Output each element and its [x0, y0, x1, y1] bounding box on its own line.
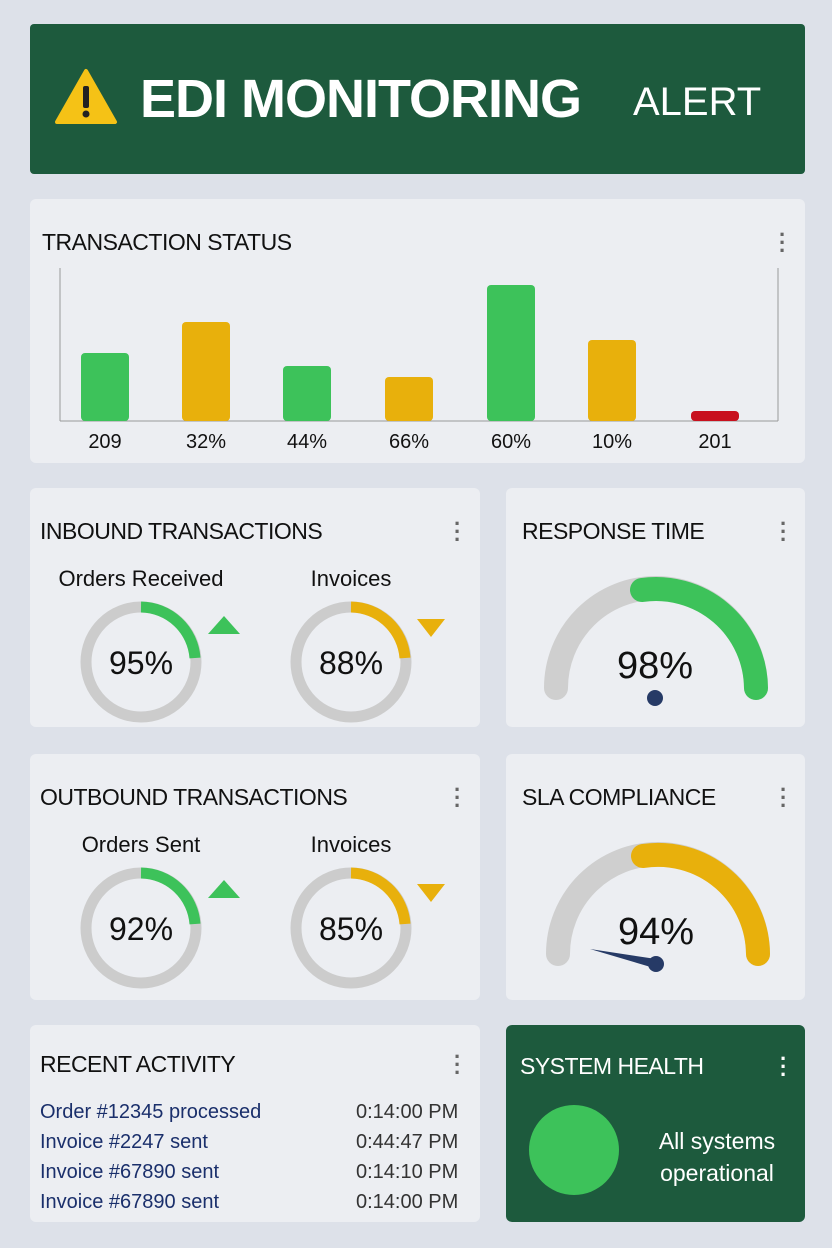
panel: inbound transactions: [30, 488, 480, 727]
bar chart: 66%: [389, 431, 429, 453]
panel: SLA compliance: [506, 754, 805, 1000]
panel: SLA compliance: 94%: [618, 911, 694, 953]
panel: transaction status: TRANSACTION STATUS: [42, 229, 292, 255]
header: [30, 24, 805, 174]
panel: inbound transactions: Invoices: [311, 566, 391, 591]
panel: system health: [506, 1025, 805, 1222]
panel: SLA compliance: SLA COMPLIANCE: [522, 784, 716, 810]
panel: outbound transactions: [30, 754, 480, 1000]
panel: recent activity: ·: [454, 1060, 461, 1085]
panel: response time: 98%: [617, 645, 693, 687]
panel: system health: SYSTEM HEALTH: [520, 1053, 704, 1079]
panel: outbound transactions: ·: [454, 793, 461, 818]
panel: recent activity: 0:14:10 PM: [356, 1161, 458, 1183]
panel: recent activity: Order #12345 processed: [40, 1101, 261, 1123]
panel: outbound transactions: ·: [454, 777, 461, 802]
panel: transaction status: ·: [779, 222, 786, 247]
bar chart: [60, 268, 778, 453]
panel: response time: [506, 488, 805, 727]
panel: inbound transactions: Orders Received: [58, 566, 224, 591]
panel: outbound transactions: Orders Sent: [82, 832, 200, 857]
panel: recent activity: Invoice #67890 sent: [40, 1161, 219, 1183]
panel: transaction status: [30, 199, 805, 463]
bar chart: 209: [88, 431, 122, 453]
bar chart: 201: [698, 431, 732, 453]
panel: recent activity: ·: [454, 1044, 461, 1069]
panel: transaction status: ·: [779, 238, 786, 263]
panel: outbound transactions: Invoices: [311, 832, 391, 857]
panel: outbound transactions: OUTBOUND TRANSACTIONS: [40, 784, 347, 810]
panel: recent activity: RECENT ACTIVITY: [40, 1051, 235, 1077]
panel: SLA compliance: ·: [780, 785, 787, 810]
panel: inbound transactions: INBOUND TRANSACTIONS: [40, 518, 322, 544]
panel: response time: ·: [780, 527, 787, 552]
panel: recent activity: 0:44:47 PM: [356, 1131, 458, 1153]
panel: system health: All systems operational: [659, 1128, 775, 1186]
bar chart: 10%: [592, 431, 632, 453]
panel: response time: ·: [780, 511, 787, 536]
bar chart: 32%: [186, 431, 226, 453]
panel: inbound transactions: 95%: [109, 645, 173, 681]
panel: response time: RESPONSE TIME: [522, 518, 704, 544]
panel: SLA compliance: ·: [780, 777, 787, 802]
panel: outbound transactions: ·: [454, 785, 461, 810]
panel: system health: ·: [780, 1054, 787, 1079]
title: EDI MONITORING: [140, 69, 581, 129]
panel: outbound transactions: 92%: [109, 911, 173, 947]
bar chart: 60%: [491, 431, 531, 453]
panel: response time: ·: [780, 519, 787, 544]
panel: outbound transactions: 85%: [319, 911, 383, 947]
header: ALERT: [633, 80, 761, 124]
panel: inbound transactions: ·: [454, 519, 461, 544]
panel: recent activity: 0:14:00 PM: [356, 1191, 458, 1213]
panel: system health: ·: [780, 1062, 787, 1087]
panel: system health: ·: [780, 1046, 787, 1071]
panel: recent activity: Invoice #2247 sent: [40, 1131, 208, 1153]
panel: inbound transactions: ·: [454, 511, 461, 536]
panel: inbound transactions: 88%: [319, 645, 383, 681]
panel: recent activity: 0:14:00 PM: [356, 1101, 458, 1123]
panel: SLA compliance: ·: [780, 793, 787, 818]
bar chart: 44%: [287, 431, 327, 453]
panel: recent activity: Invoice #67890 sent: [40, 1191, 219, 1213]
panel: recent activity: ·: [454, 1052, 461, 1077]
icon: warning: [55, 68, 118, 124]
panel: recent activity: [30, 1025, 480, 1222]
icon: status circle: [529, 1105, 619, 1195]
panel: transaction status: ·: [779, 230, 786, 255]
panel: inbound transactions: ·: [454, 527, 461, 552]
